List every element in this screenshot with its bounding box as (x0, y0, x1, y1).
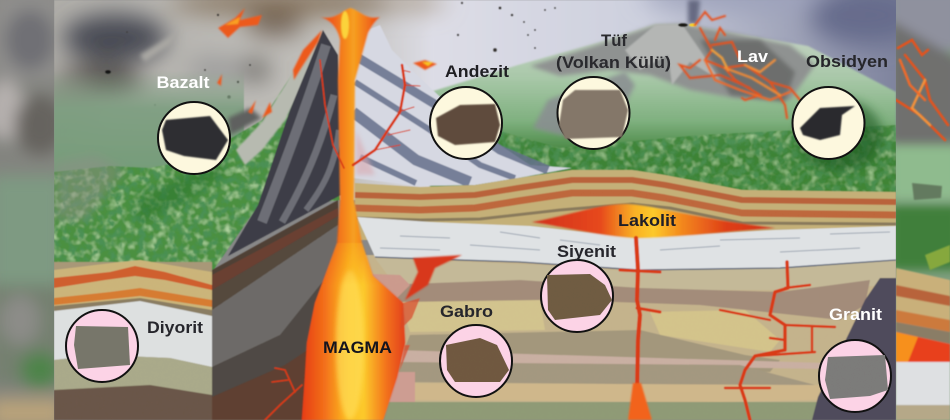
rock circle: Bazalt (158, 102, 230, 174)
label: Lav: Lav (737, 47, 769, 66)
panel: blurred right edge (890, 0, 950, 420)
magma bulge at base of main dike (628, 383, 652, 420)
central block strata (212, 200, 345, 420)
label: Lakolit: Lakolit (618, 211, 676, 230)
rock circle: Andezit (430, 87, 502, 159)
right block strata (355, 170, 896, 240)
granite intrusion (812, 278, 896, 420)
panel: blurred left edge (0, 12, 54, 420)
label: Granit: Granit (829, 305, 882, 324)
label: Bazalt: Bazalt (156, 73, 210, 92)
left ground with forest (54, 54, 341, 270)
cut volcano face, dark stripes (228, 30, 341, 256)
label: Siyenit: Siyenit (557, 242, 616, 261)
label: Andezit: Andezit (445, 62, 509, 81)
rock circle: Granit (819, 340, 891, 412)
laccolith magma body (532, 204, 775, 238)
smoke debris specks (105, 2, 556, 106)
lower rock layers (355, 255, 896, 420)
erupting lava splatter (217, 8, 437, 118)
label: Tuf (Volkan Kulu): (Volkan Külü) (556, 53, 671, 72)
white limestone layer (357, 217, 896, 270)
striped right flank (353, 25, 572, 186)
rock circle: Diyorit (66, 310, 138, 382)
rock circle: Gabro (440, 325, 512, 397)
label: Diyorit: Diyorit (147, 318, 203, 337)
distant volcano and right hillside (430, 23, 896, 200)
red dikes and veins (265, 60, 835, 420)
rock circle: Siyenit (541, 260, 613, 332)
rock circle: Obsidyen (792, 87, 864, 159)
rock circle: Tuf (558, 77, 630, 149)
magma conduit and chamber (302, 8, 420, 420)
lava flow on distant volcano (680, 12, 800, 118)
label: Obsidyen: Obsidyen (806, 52, 888, 71)
red dike wedge from chamber (405, 255, 462, 300)
sky and smoke background (35, 0, 920, 200)
label: Tuf (Volkan Kulu) (556, 31, 671, 72)
label: Tuf (Volkan Kulu): Tüf (601, 31, 627, 50)
left block strata (54, 260, 212, 420)
label: Gabro: Gabro (440, 302, 493, 321)
label: MAGMA: MAGMA (323, 338, 392, 357)
